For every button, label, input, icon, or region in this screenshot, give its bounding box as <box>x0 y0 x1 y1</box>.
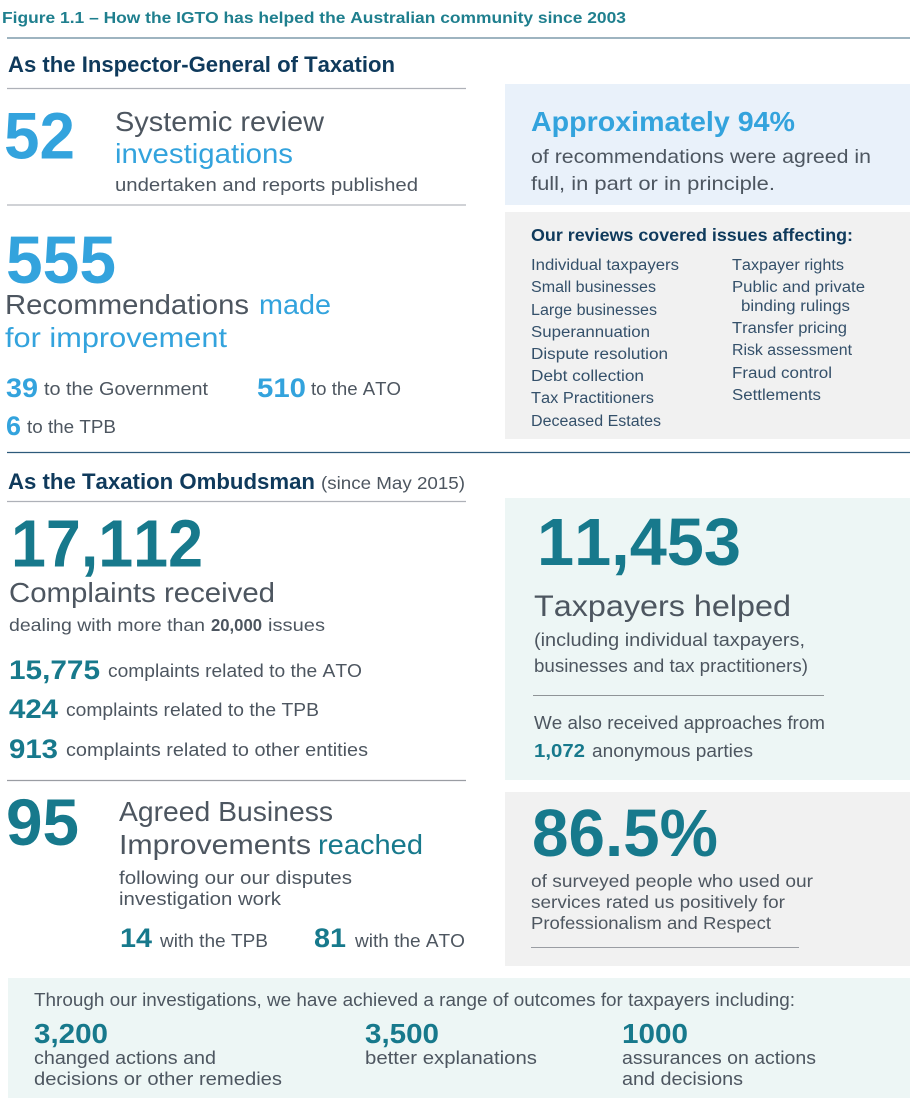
outcome: 1000: and decisions <box>622 1068 743 1089</box>
breakdown: recommendations by recipient: 39 <box>6 373 38 403</box>
breakdown: improvements by entity: 14 <box>120 923 152 953</box>
breakdown: recommendations by recipient: 6 <box>6 411 21 441</box>
panel: 11,453 taxpayers helped <box>505 498 910 780</box>
breakdown: complaints by entity: complaints related to the TPB <box>66 700 319 720</box>
outcome: 1000 <box>622 1018 816 1089</box>
panel: reviews covered issues <box>505 212 910 439</box>
stat: 95 agreed business improvements: investigation work <box>119 888 282 909</box>
stat: 17,112 complaints received: issues <box>268 615 325 635</box>
panel: 11,453 taxpayers helped: (including individual taxpayers, <box>534 630 805 650</box>
outcome: 1000: assurances on actions <box>622 1047 816 1068</box>
section: Inspector-General of Taxation <box>4 52 466 441</box>
stat: 17,112 complaints received: 17,112 <box>11 506 203 582</box>
stat: 17,112 complaints received: 20,000 <box>211 615 262 635</box>
panel: 11,453 taxpayers helped: anonymous parties <box>592 741 753 761</box>
stat: 95 agreed business improvements: following our our disputes <box>119 867 352 888</box>
stat: 95 agreed business improvements: 95 <box>6 785 79 859</box>
list: right column: Public and private <box>732 279 865 296</box>
list: right column <box>732 257 865 404</box>
figure title: Figure 1.1 – How the IGTO has helped the Australian community since 2003 <box>2 10 626 27</box>
outcome: 3,200: changed actions and <box>34 1047 216 1068</box>
panel heading: Our reviews covered issues affecting: <box>531 225 853 245</box>
section: Taxation Ombudsman <box>6 469 466 953</box>
outcomes intro: Through our investigations, we have achieved a range of outcomes for taxpayers including: <box>34 990 795 1010</box>
panel: 86.5% satisfaction: of surveyed people who used our <box>531 871 813 891</box>
stat: 52 systemic review investigations <box>4 98 418 195</box>
panel: investigation outcomes <box>8 978 910 1098</box>
outcome: 1000: 1000 <box>622 1018 688 1049</box>
breakdown: recommendations by recipient: to the TPB <box>27 416 116 437</box>
list: left column: Debt collection <box>531 368 644 385</box>
stat: 95 agreed business improvements: reached <box>318 829 423 860</box>
breakdown: complaints by entity: complaints related to the ATO <box>108 661 362 681</box>
panel: 86.5% satisfaction: services rated us positively for <box>531 892 785 912</box>
panel: approximately 94%: Approximately 94% <box>531 106 795 137</box>
panel: 11,453 taxpayers helped: Taxpayers helped <box>534 590 791 623</box>
breakdown: recommendations by recipient <box>6 373 401 441</box>
breakdown: improvements by entity: with the TPB <box>159 930 268 951</box>
heading: Taxation Ombudsman: As the Taxation Ombudsman <box>8 469 315 494</box>
breakdown: recommendations by recipient: 510 <box>257 373 306 403</box>
breakdown: improvements by entity <box>120 923 465 953</box>
stat: 52 systemic review investigations: undertaken and reports published <box>115 174 418 195</box>
outcome: 3,200: decisions or other remedies <box>34 1068 282 1089</box>
stat: 555 recommendations <box>5 223 331 353</box>
stat: 17,112 complaints received <box>9 506 325 635</box>
list: left column: Superannuation <box>531 324 650 341</box>
panel: 86.5% satisfaction: Professionalism and Respect <box>531 913 771 933</box>
list: left column: Large businesses <box>531 302 657 319</box>
panel: approximately 94%: full, in part or in principle. <box>531 173 775 195</box>
list: left column: Individual taxpayers <box>531 257 679 274</box>
breakdown: recommendations by recipient: to the Government <box>44 378 208 399</box>
stat: 555 recommendations: Recommendations <box>5 289 249 320</box>
heading: Taxation Ombudsman <box>8 469 465 494</box>
heading: Taxation Ombudsman: (since May 2015) <box>321 473 465 493</box>
list: left column <box>531 257 679 430</box>
heading: Inspector-General: As the Inspector-General of Taxation <box>8 52 395 77</box>
list: left column: Dispute resolution <box>531 346 668 363</box>
stat: 52 systemic review investigations: investigations <box>115 138 293 169</box>
outcome: 3,200 <box>34 1018 282 1089</box>
stat: 555 recommendations: 555 <box>6 223 116 298</box>
panel: 86.5% satisfaction: 86.5% <box>532 796 718 871</box>
stat: 95 agreed business improvements: Agreed Business <box>119 796 333 827</box>
list: left column: Tax Practitioners <box>531 390 654 407</box>
breakdown: complaints by entity: complaints related to other entities <box>66 740 368 760</box>
stat: 17,112 complaints received: dealing with more than <box>9 615 205 635</box>
list: right column: binding rulings <box>741 298 850 315</box>
breakdown: improvements by entity: with the ATO <box>354 930 465 951</box>
stat: 95 agreed business improvements: Improvements <box>119 829 311 860</box>
breakdown: complaints by entity: 15,775 <box>9 655 100 685</box>
stat: 95 agreed business improvements <box>6 785 423 909</box>
panel: 86.5% satisfaction <box>505 792 910 966</box>
panel: 11,453 taxpayers helped: 1,072 <box>534 740 585 761</box>
breakdown: complaints by entity: 913 <box>9 734 58 764</box>
list: right column: Risk assessment <box>732 342 853 359</box>
outcome: 3,200: 3,200 <box>34 1018 108 1049</box>
list: left column: Deceased Estates <box>531 413 661 430</box>
stat: 555 recommendations: made <box>259 289 331 320</box>
list: right column: Settlements <box>732 387 821 404</box>
stat: 52 systemic review investigations: Systemic review <box>115 106 325 137</box>
breakdown: complaints by entity <box>9 655 368 764</box>
stat: 555 recommendations: for improvement <box>5 322 227 353</box>
list: right column: Taxpayer rights <box>732 257 844 274</box>
breakdown: improvements by entity: 81 <box>314 923 346 953</box>
panel: approximately 94% <box>505 84 910 205</box>
breakdown: recommendations by recipient: to the ATO <box>311 378 401 399</box>
panel: 11,453 taxpayers helped: We also received approaches from <box>534 713 825 733</box>
list: left column: Small businesses <box>531 279 656 296</box>
breakdown: complaints by entity: 424 <box>9 694 58 724</box>
outcome: 3,500: better explanations <box>365 1047 537 1068</box>
list: right column: Fraud control <box>732 365 832 382</box>
panel: 11,453 taxpayers helped: businesses and tax practitioners) <box>534 656 808 676</box>
stat: 52 systemic review investigations: 52 <box>4 98 75 172</box>
stat: 17,112 complaints received: Complaints received <box>9 577 275 608</box>
panel: approximately 94%: of recommendations were agreed in <box>531 146 871 168</box>
outcome: 3,500: 3,500 <box>365 1018 439 1049</box>
outcome: 3,500 <box>365 1018 537 1068</box>
list: right column: Transfer pricing <box>732 320 847 337</box>
panel: 11,453 taxpayers helped: 11,453 <box>537 505 741 580</box>
